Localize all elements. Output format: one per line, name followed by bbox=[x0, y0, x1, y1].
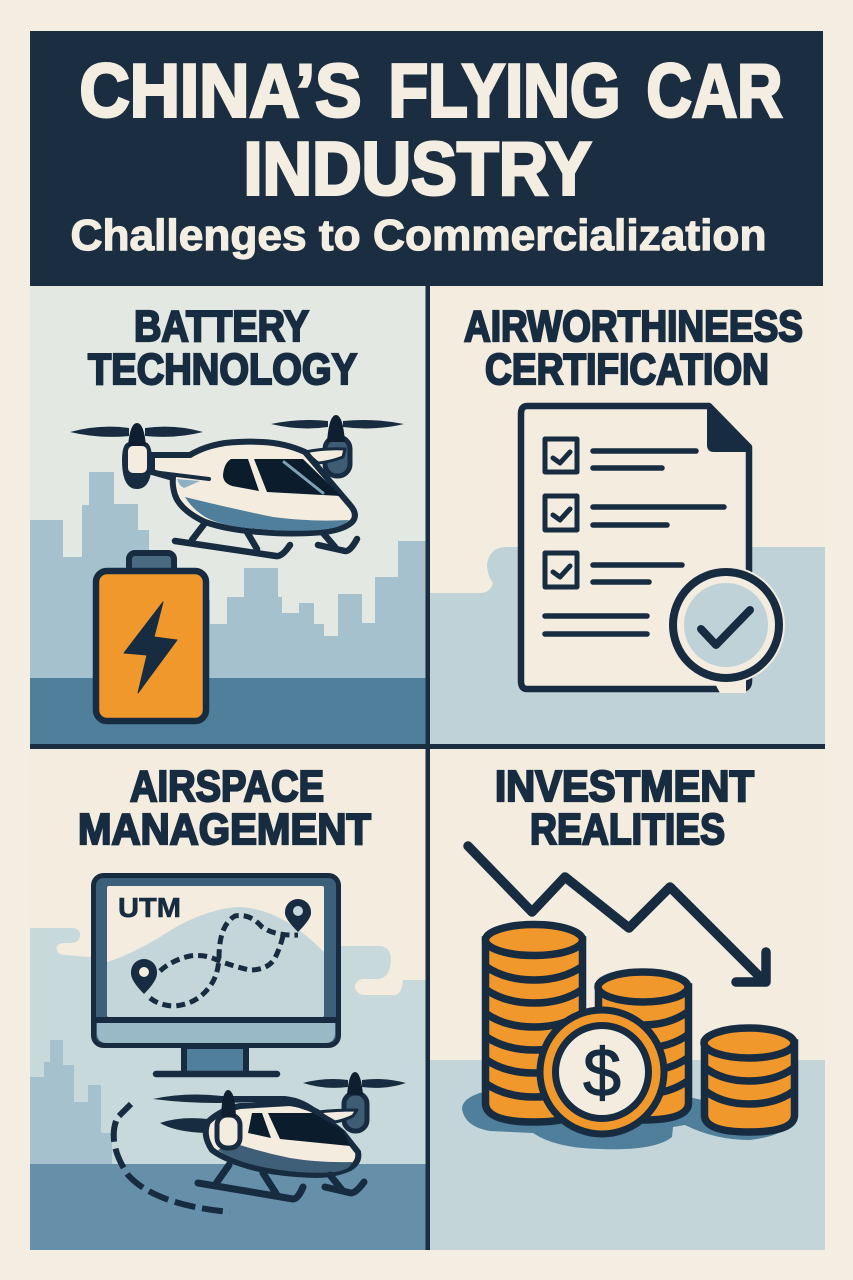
icon: tall coin stack bbox=[485, 924, 583, 1122]
icon: flying car bbox=[153, 1072, 406, 1199]
panel: battery technology bbox=[30, 286, 427, 745]
title: CHINA’S bbox=[80, 48, 362, 132]
checklist row 1 bbox=[545, 439, 696, 472]
heading: airworthiness certification: CERTIFICATION bbox=[485, 346, 769, 394]
heading: airspace management: AIRSPACE bbox=[130, 763, 324, 811]
ground band bbox=[430, 1060, 825, 1250]
city skyline bbox=[30, 1040, 112, 1165]
panel: airspace management bbox=[30, 749, 427, 1250]
ground shape bbox=[430, 547, 825, 745]
icon: short coin stack bbox=[704, 1028, 795, 1132]
heading: battery technology bbox=[88, 303, 357, 394]
icon: battery bbox=[96, 553, 206, 721]
subtitle: Challenges to Commercialization bbox=[70, 211, 766, 260]
heading: battery technology: BATTERY bbox=[134, 303, 309, 351]
heading: battery technology: TECHNOLOGY bbox=[88, 346, 357, 394]
icon: medium coin stack bbox=[598, 972, 689, 1120]
title: CAR bbox=[646, 48, 782, 132]
icon: dollar coin bbox=[540, 1010, 664, 1134]
ground shape bbox=[30, 928, 426, 1250]
panel: investment realities bbox=[430, 749, 825, 1250]
dashed flight routes bbox=[150, 915, 298, 1006]
dashed flight trail bbox=[114, 1104, 230, 1212]
heading: airworthiness certification: AIRWORTHINEESS bbox=[464, 303, 803, 351]
heading: airworthiness certification bbox=[464, 303, 803, 394]
ground band bbox=[30, 678, 426, 745]
title: INDUSTRY bbox=[244, 126, 592, 210]
heading: investment realities: REALITIES bbox=[530, 806, 725, 854]
approval seal bbox=[667, 566, 785, 693]
title bbox=[80, 48, 782, 210]
arrow: declining trend bbox=[468, 846, 766, 982]
document text lines bbox=[545, 616, 647, 634]
heading: investment realities bbox=[495, 763, 754, 854]
header banner bbox=[30, 31, 823, 286]
icon: UTM monitor bbox=[94, 876, 338, 1074]
title: FLYING bbox=[388, 48, 620, 132]
heading: airspace management bbox=[78, 763, 371, 854]
icon: flying car bbox=[70, 415, 404, 556]
checklist row 2 bbox=[545, 496, 724, 530]
heading: investment realities: INVESTMENT bbox=[495, 763, 754, 811]
map pin: destination bbox=[285, 899, 311, 932]
heading: airspace management: MANAGEMENT bbox=[78, 806, 371, 854]
icon: checklist document bbox=[521, 404, 785, 693]
UTM label: UTM bbox=[118, 892, 181, 923]
ground band bbox=[30, 1164, 426, 1250]
map pin: origin bbox=[131, 959, 157, 994]
coin shadow bbox=[462, 1092, 795, 1149]
panel: airworthiness certification bbox=[430, 286, 825, 745]
grid dividers bbox=[30, 286, 825, 1250]
city skyline bbox=[30, 472, 426, 680]
icon: dollar coin: $ bbox=[583, 1035, 621, 1111]
checklist row 3 bbox=[545, 553, 682, 587]
